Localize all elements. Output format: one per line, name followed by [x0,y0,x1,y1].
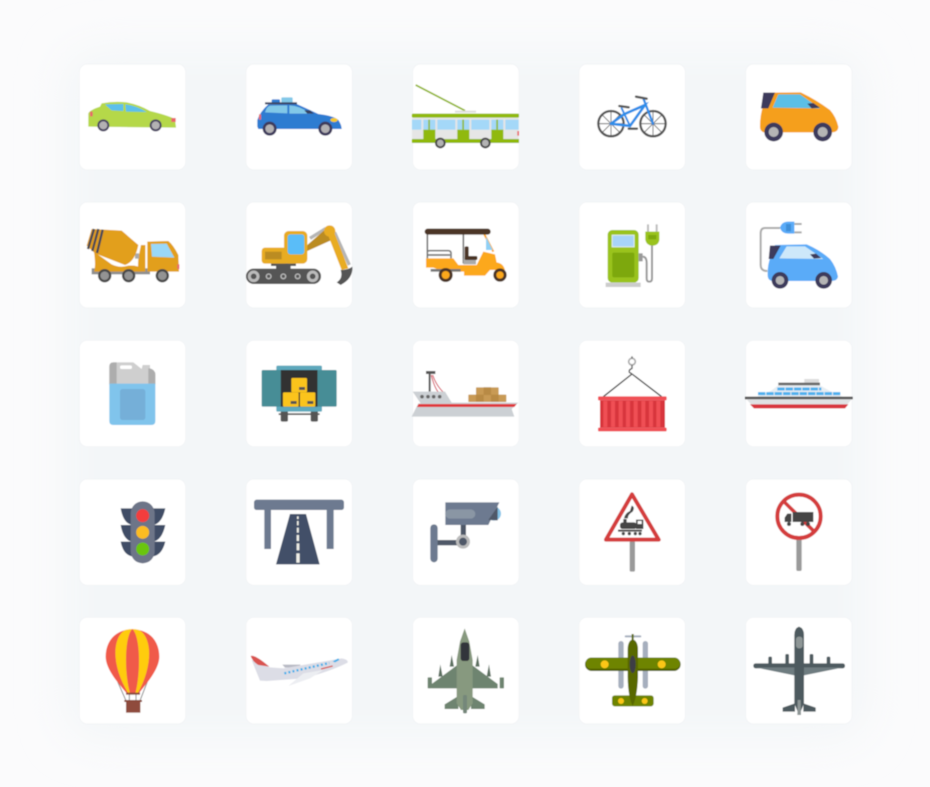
panel: bicycle [579,64,685,170]
panel: hot air balloon [79,617,186,724]
panel: row 5, right icons [579,617,852,724]
panel: cement mixer truck [79,202,186,308]
panel: railway crossing warning sign [579,479,685,585]
panel: electric car with plug [746,202,852,308]
panel: trolleybus [412,64,519,170]
panel: row 1-2, left icons [79,64,519,308]
panel: orange city car [746,64,852,170]
panel: row 3-4, left icons [79,340,519,585]
panel: passenger airplane [246,617,352,724]
panel: highway overpass road [246,479,352,585]
panel: tuk-tuk [413,202,519,308]
panel: traffic light [79,479,186,585]
panel: cargo ship [412,340,519,447]
panel: olive biplane [579,617,685,724]
panel: row 3-4, right icons [579,340,853,585]
panel: shipping container on hook [579,340,685,447]
panel: green car [79,64,186,170]
panel: fighter jet [413,617,519,724]
panel: EV charging station [579,202,685,308]
panel: security camera [413,479,519,585]
panel: grey military transport plane [746,617,852,724]
panel: open cargo truck [246,340,352,447]
panel: blue car [246,64,352,170]
panel: row 5, left icons [79,617,519,724]
panel: no trucks sign [746,479,852,585]
panel: row 1-2, right icons [579,64,852,308]
panel: passenger ferry [745,340,853,447]
panel: jerry can [79,340,186,447]
panel: excavator [246,202,352,308]
